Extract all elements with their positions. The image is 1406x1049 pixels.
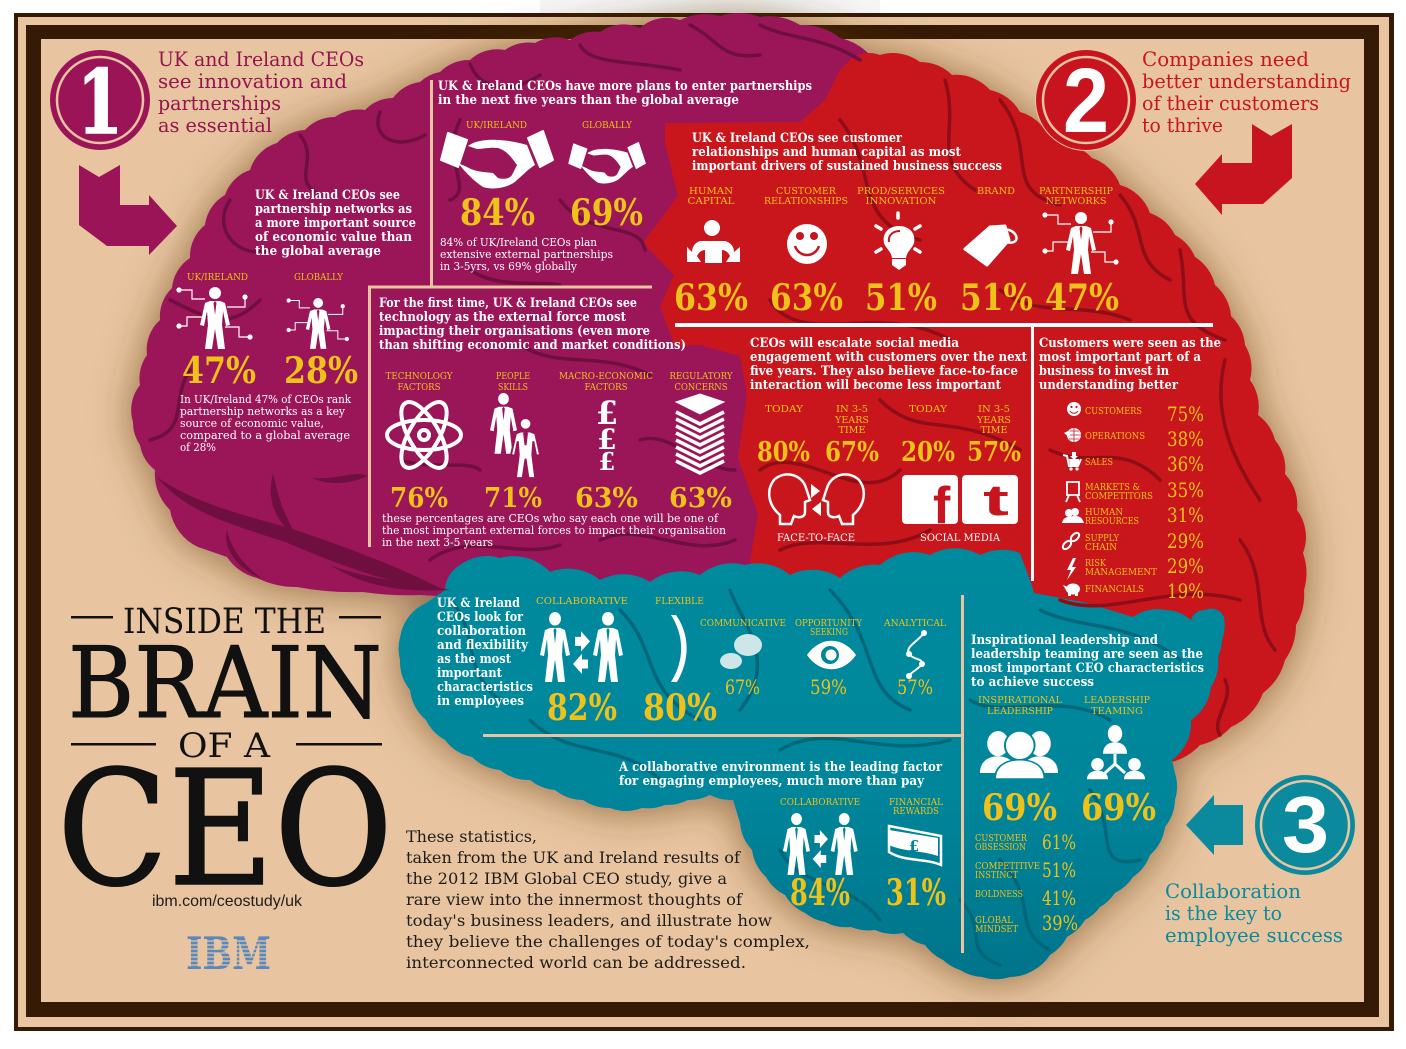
list labels: OPERATIONS bbox=[1085, 431, 1145, 442]
section 1 heading: UK and Ireland CEOs bbox=[158, 47, 364, 71]
panel: engagement factors bbox=[618, 760, 946, 914]
list values: 29% bbox=[1167, 554, 1204, 578]
list labels: MANAGEMENT bbox=[1085, 567, 1158, 578]
description: source of economic value, bbox=[180, 417, 324, 430]
section 2 heading: Companies need bbox=[1142, 47, 1309, 71]
panel heading bbox=[971, 633, 1204, 690]
percentages small: 59% bbox=[810, 675, 847, 699]
percentages: 63% bbox=[674, 277, 748, 319]
labels: CONCERNS bbox=[674, 382, 728, 393]
panel heading: than shifting economic and market conditions) bbox=[379, 338, 686, 353]
percentages: 63% bbox=[575, 483, 638, 514]
description bbox=[440, 236, 613, 273]
labels: OPPORTUNITY bbox=[795, 618, 863, 629]
list values: 36% bbox=[1167, 452, 1204, 476]
page top shadow bbox=[540, 0, 880, 13]
labels: TIME bbox=[980, 425, 1008, 436]
panel heading: for engaging employees, much more than pay bbox=[619, 774, 924, 789]
list values: 51% bbox=[1042, 858, 1076, 882]
panel heading bbox=[379, 296, 686, 353]
28 percent: 28% bbox=[284, 350, 358, 392]
panel heading: CEOs will escalate social media bbox=[750, 336, 960, 351]
labels: LEADERSHIP bbox=[1084, 695, 1151, 706]
labels: YEARS bbox=[976, 415, 1011, 426]
list values: 38% bbox=[1167, 427, 1204, 451]
percentages: 76% bbox=[390, 483, 448, 514]
labels bbox=[536, 596, 947, 638]
percentages: 57% bbox=[967, 437, 1021, 468]
panel heading: in employees bbox=[437, 694, 524, 709]
icon: pound signs: £ bbox=[599, 447, 615, 476]
list values: 61% bbox=[1042, 830, 1076, 854]
panel heading: to achieve success bbox=[971, 675, 1094, 690]
list values: 35% bbox=[1167, 478, 1204, 502]
brain illustration bbox=[131, 13, 1306, 979]
panel heading bbox=[438, 79, 812, 108]
labels: CUSTOMER bbox=[776, 186, 837, 197]
section 1 heading: see innovation and bbox=[158, 69, 347, 93]
labels: TODAY bbox=[765, 404, 804, 415]
list values: 75% bbox=[1167, 402, 1204, 426]
percentages: 63% bbox=[770, 277, 843, 319]
section 2 heading: of their customers bbox=[1142, 91, 1319, 115]
list labels: COMPETITIVE bbox=[975, 861, 1040, 872]
section 3 badge bbox=[1255, 775, 1355, 875]
percentages: 63% bbox=[669, 483, 732, 514]
percentages bbox=[790, 872, 946, 914]
labels: MACRO-ECONOMIC bbox=[559, 371, 653, 382]
captions: FACE-TO-FACE bbox=[777, 533, 855, 544]
title: CEO bbox=[57, 737, 393, 922]
footnote: in the next 3-5 years bbox=[382, 536, 493, 549]
labels: INSPIRATIONAL bbox=[978, 695, 1063, 706]
footnote: the most important external forces to impact their organisation bbox=[382, 524, 726, 537]
panel heading: For the first time, UK & Ireland CEOs see bbox=[379, 296, 637, 311]
icon: human capital bbox=[687, 220, 740, 263]
icon: small handshake bbox=[569, 143, 645, 183]
list labels: CHAIN bbox=[1085, 542, 1117, 553]
labels: FACTORS bbox=[398, 382, 440, 393]
section 1 badge bbox=[50, 50, 150, 154]
list labels: CUSTOMERS bbox=[1085, 406, 1142, 417]
icon: light bulb bbox=[876, 213, 920, 270]
list values: 41% bbox=[1042, 886, 1076, 910]
icon: document stack bbox=[676, 394, 724, 473]
labels: SEEKING bbox=[810, 627, 848, 638]
list labels: OBSESSION bbox=[975, 842, 1026, 853]
intro text: These statistics, bbox=[406, 827, 537, 846]
panel heading: most important part of a bbox=[1039, 350, 1202, 365]
description: compared to a global average bbox=[180, 429, 350, 442]
icon: networked businessman UK bbox=[176, 287, 253, 349]
panel heading: as the most bbox=[437, 652, 511, 667]
icon: networked businessman bbox=[1042, 212, 1119, 274]
labels: FACTORS bbox=[584, 382, 628, 393]
labels: NETWORKS bbox=[1046, 196, 1106, 207]
panel heading: the global average bbox=[255, 244, 381, 259]
panel heading: A collaborative environment is the leading factor bbox=[618, 760, 942, 775]
list labels: BOLDNESS bbox=[975, 889, 1023, 900]
section 1 heading bbox=[158, 47, 364, 137]
description: in 3-5yrs, vs 69% globally bbox=[440, 260, 578, 273]
section 3 heading: employee success bbox=[1165, 923, 1343, 947]
section 3 heading: is the key to bbox=[1165, 901, 1282, 925]
section 3 heading: Collaboration bbox=[1165, 879, 1301, 903]
arrow: section 3 bbox=[1186, 795, 1243, 855]
panel heading: of economic value than bbox=[255, 230, 413, 245]
labels: YEARS bbox=[834, 415, 869, 426]
panel heading: UK & Ireland bbox=[437, 596, 520, 611]
icon: large handshake bbox=[441, 131, 553, 188]
percentages: 69% bbox=[982, 787, 1057, 829]
description: of 28% bbox=[180, 441, 216, 454]
labels: REGULATORY bbox=[670, 371, 733, 382]
list labels: INSTINCT bbox=[975, 870, 1019, 881]
percentages bbox=[390, 483, 732, 514]
panel heading bbox=[255, 188, 416, 259]
panel heading: technology as the external force most bbox=[379, 310, 626, 325]
intro text: rare view into the innermost thoughts of bbox=[406, 890, 743, 909]
panel heading: business to invest in bbox=[1039, 364, 1169, 379]
labels: IN 3-5 bbox=[836, 404, 868, 415]
footnote: these percentages are CEOs who say each one will be one of bbox=[382, 512, 719, 525]
labels: GLOBALLY bbox=[294, 272, 344, 283]
list labels: RESOURCES bbox=[1085, 516, 1139, 527]
labels: PARTNERSHIP bbox=[1039, 186, 1114, 197]
list values bbox=[1167, 402, 1204, 603]
panel heading: and flexibility bbox=[437, 638, 528, 653]
icon: leadership team bbox=[1087, 725, 1145, 779]
section 2 heading: to thrive bbox=[1142, 113, 1223, 137]
panel: partnership plans bbox=[430, 79, 812, 287]
labels: PROD/SERVICES bbox=[857, 186, 945, 197]
icon: brand tag bbox=[965, 226, 1019, 265]
labels: SKILLS bbox=[498, 382, 528, 393]
percentages: 51% bbox=[960, 277, 1033, 319]
panel heading bbox=[618, 760, 942, 789]
labels bbox=[765, 404, 1011, 436]
list labels: COMPETITORS bbox=[1085, 491, 1153, 502]
percentages: 80% bbox=[757, 437, 810, 468]
description: partnership networks as a key bbox=[180, 405, 346, 418]
panel heading: Customers were seen as the bbox=[1039, 336, 1221, 351]
footnote bbox=[382, 512, 726, 549]
intro text bbox=[406, 827, 810, 972]
section 2 badge bbox=[1035, 49, 1137, 152]
icon: pound signs: £ bbox=[597, 423, 617, 456]
description bbox=[180, 393, 351, 454]
arrow: section 2 bbox=[1195, 124, 1292, 215]
percentages: 69% bbox=[1081, 787, 1156, 829]
icon: collaborating men bbox=[540, 612, 623, 682]
panel heading bbox=[692, 131, 1002, 174]
panel: success drivers bbox=[674, 131, 1119, 319]
icon: banknote bbox=[889, 826, 941, 865]
labels: CAPITAL bbox=[688, 196, 735, 207]
labels bbox=[978, 695, 1151, 717]
IBM logo: IBM bbox=[186, 927, 271, 980]
panel heading: impacting their organisations (even more bbox=[379, 324, 650, 339]
title: BRAIN bbox=[68, 627, 382, 741]
panel heading: relationships and human capital as most bbox=[692, 145, 961, 160]
percentages: 51% bbox=[865, 277, 937, 319]
list labels: RISK bbox=[1085, 558, 1107, 569]
panel: employee characteristics bbox=[437, 596, 947, 729]
panel: partnership networks bbox=[176, 188, 416, 454]
percentages bbox=[674, 277, 1119, 319]
labels bbox=[466, 120, 633, 131]
labels bbox=[386, 371, 733, 393]
icon: face to face bbox=[769, 474, 864, 524]
labels: UK/IRELAND bbox=[466, 120, 527, 131]
panel heading: Inspirational leadership and bbox=[971, 633, 1158, 648]
title: OF A bbox=[178, 726, 270, 766]
labels: TECHNOLOGY bbox=[386, 371, 453, 382]
panel heading: a more important source bbox=[255, 216, 416, 231]
website link: ibm.com/ceostudy/uk bbox=[152, 893, 303, 910]
84 percent: 84% bbox=[460, 192, 535, 234]
panel heading bbox=[750, 336, 1027, 393]
section 3 heading bbox=[1165, 879, 1343, 947]
labels: HUMAN bbox=[689, 186, 733, 197]
section 2 heading bbox=[1142, 47, 1351, 137]
labels: LEADERSHIP bbox=[987, 706, 1054, 717]
icon: eye bbox=[807, 641, 856, 669]
icon: pound signs bbox=[596, 394, 618, 476]
title: INSIDE THE bbox=[123, 602, 326, 642]
divider bbox=[430, 80, 433, 287]
icon: twitter: t bbox=[983, 476, 1010, 525]
icon: atom bbox=[387, 395, 461, 475]
percentages large: 82% bbox=[547, 687, 617, 729]
intro text: taken from the UK and Ireland results of bbox=[406, 848, 741, 867]
labels: COLLABORATIVE bbox=[536, 596, 628, 607]
69 percent: 69% bbox=[570, 192, 643, 234]
icon: people bbox=[490, 393, 540, 478]
panel heading: understanding better bbox=[1039, 378, 1178, 393]
labels bbox=[187, 272, 344, 283]
percentages: 20% bbox=[901, 437, 955, 468]
labels: BRAND bbox=[977, 186, 1015, 197]
captions: SOCIAL MEDIA bbox=[920, 533, 1001, 544]
intro text: they believe the challenges of today's complex, bbox=[406, 932, 810, 951]
list icons bbox=[1061, 402, 1084, 596]
percentages: 47% bbox=[1045, 277, 1119, 319]
icon: analytical path bbox=[906, 630, 927, 679]
icon: smiley bbox=[787, 224, 827, 264]
arrow: section 1 bbox=[79, 165, 177, 255]
list labels: SUPPLY bbox=[1085, 533, 1120, 544]
panel heading: leadership teaming are seen as the bbox=[971, 647, 1203, 662]
percentages bbox=[757, 437, 1021, 468]
icon: speech bubbles bbox=[720, 634, 762, 669]
panel heading: characteristics bbox=[437, 680, 533, 695]
labels: COMMUNICATIVE bbox=[700, 618, 786, 629]
panel heading: collaboration bbox=[437, 624, 526, 639]
labels: UK/IRELAND bbox=[187, 272, 248, 283]
description: extensive external partnerships bbox=[440, 248, 613, 261]
percentages bbox=[982, 787, 1156, 829]
panel: leadership bbox=[971, 633, 1204, 935]
list values: 19% bbox=[1167, 579, 1204, 603]
labels: ANALYTICAL bbox=[883, 618, 947, 629]
labels: RELATIONSHIPS bbox=[764, 196, 848, 207]
panel heading: in the next five years than the global average bbox=[438, 93, 739, 108]
percentages: 71% bbox=[484, 483, 542, 514]
labels: INNOVATION bbox=[866, 196, 936, 207]
description: 84% of UK/Ireland CEOs plan bbox=[440, 236, 597, 249]
panel: external forces bbox=[370, 287, 733, 549]
section 1 heading: as essential bbox=[158, 113, 272, 137]
panel heading: interaction will become less important bbox=[750, 378, 1001, 393]
intro text: the 2012 IBM Global CEO study, give a bbox=[406, 869, 727, 888]
section 1 heading: partnerships bbox=[158, 91, 281, 115]
intro text: interconnected world can be addressed. bbox=[406, 953, 746, 972]
icon: collaborating men bbox=[783, 813, 858, 875]
labels: TODAY bbox=[909, 404, 948, 415]
labels: TEAMING bbox=[1091, 706, 1143, 717]
section 2 badge: 2 bbox=[1063, 50, 1109, 152]
title bbox=[57, 602, 393, 922]
percentages: 84% bbox=[790, 872, 850, 914]
dividers: teal lobe bbox=[483, 595, 964, 953]
captions bbox=[777, 533, 1001, 544]
panel heading bbox=[437, 596, 533, 709]
labels bbox=[780, 797, 944, 817]
panel heading: engagement with customers over the next bbox=[750, 350, 1027, 365]
list labels bbox=[1085, 406, 1158, 595]
labels: FINANCIAL bbox=[889, 797, 944, 808]
icon: flexible curve bbox=[671, 615, 687, 682]
description: In UK/Ireland 47% of CEOs rank bbox=[180, 393, 351, 406]
list labels: MINDSET bbox=[975, 924, 1019, 935]
list values: 39% bbox=[1042, 911, 1078, 935]
list labels bbox=[975, 833, 1040, 935]
percentages large bbox=[547, 687, 717, 729]
dividers: red lobe bbox=[675, 323, 1213, 581]
percentages small bbox=[725, 675, 933, 699]
panel heading bbox=[1039, 336, 1221, 393]
list labels: MARKETS & bbox=[1085, 482, 1140, 493]
panel: customer investment bbox=[1039, 336, 1221, 603]
panel heading: UK & Ireland CEOs see bbox=[255, 188, 400, 203]
labels: FLEXIBLE bbox=[655, 596, 704, 607]
list labels: HUMAN bbox=[1085, 507, 1123, 518]
list values: 29% bbox=[1167, 529, 1204, 553]
panel heading: important bbox=[437, 666, 502, 681]
icon: banknote: £ bbox=[909, 837, 919, 855]
section 1 badge: 1 bbox=[77, 50, 123, 154]
panel: social media bbox=[750, 336, 1027, 544]
list labels: GLOBAL bbox=[975, 915, 1014, 926]
list labels: CUSTOMER bbox=[975, 833, 1028, 844]
list labels: FINANCIALS bbox=[1085, 584, 1144, 595]
labels: IN 3-5 bbox=[978, 404, 1010, 415]
labels: TIME bbox=[838, 425, 866, 436]
icon: inspirational group bbox=[980, 731, 1058, 779]
panel heading: important drivers of sustained business success bbox=[692, 159, 1002, 174]
labels: GLOBALLY bbox=[582, 120, 633, 131]
percentages: 31% bbox=[886, 872, 946, 914]
intro text: today's business leaders, and illustrate how bbox=[406, 911, 772, 930]
icon: facebook bbox=[902, 475, 958, 535]
section 3 badge: 3 bbox=[1282, 780, 1329, 869]
labels bbox=[688, 186, 1114, 207]
list values: 31% bbox=[1167, 503, 1204, 527]
icon: pound signs: £ bbox=[596, 394, 618, 432]
section 2 heading: better understanding bbox=[1142, 69, 1351, 93]
percentages: 67% bbox=[825, 437, 879, 468]
labels: PEOPLE bbox=[496, 371, 530, 382]
list values bbox=[1042, 830, 1078, 935]
icon: twitter bbox=[962, 475, 1018, 525]
labels: COLLABORATIVE bbox=[780, 797, 860, 808]
list labels: SALES bbox=[1085, 457, 1113, 468]
47 percent: 47% bbox=[182, 350, 256, 392]
icon: networked businessman global bbox=[287, 298, 349, 349]
panel heading: most important CEO characteristics bbox=[971, 661, 1204, 676]
dividers bbox=[370, 287, 652, 547]
panel heading: CEOs look for bbox=[437, 610, 523, 625]
icon: facebook: f bbox=[933, 477, 951, 535]
panel heading: partnership networks as bbox=[255, 202, 412, 217]
panel heading: UK & Ireland CEOs have more plans to enter partnerships bbox=[438, 79, 812, 94]
percentages small: 57% bbox=[897, 675, 933, 699]
labels: REWARDS bbox=[893, 806, 939, 817]
panel heading: UK & Ireland CEOs see customer bbox=[692, 131, 902, 146]
percentages small: 67% bbox=[725, 675, 760, 699]
panel heading: five years. They also believe face-to-face bbox=[750, 364, 1018, 379]
percentages large: 80% bbox=[643, 687, 717, 729]
